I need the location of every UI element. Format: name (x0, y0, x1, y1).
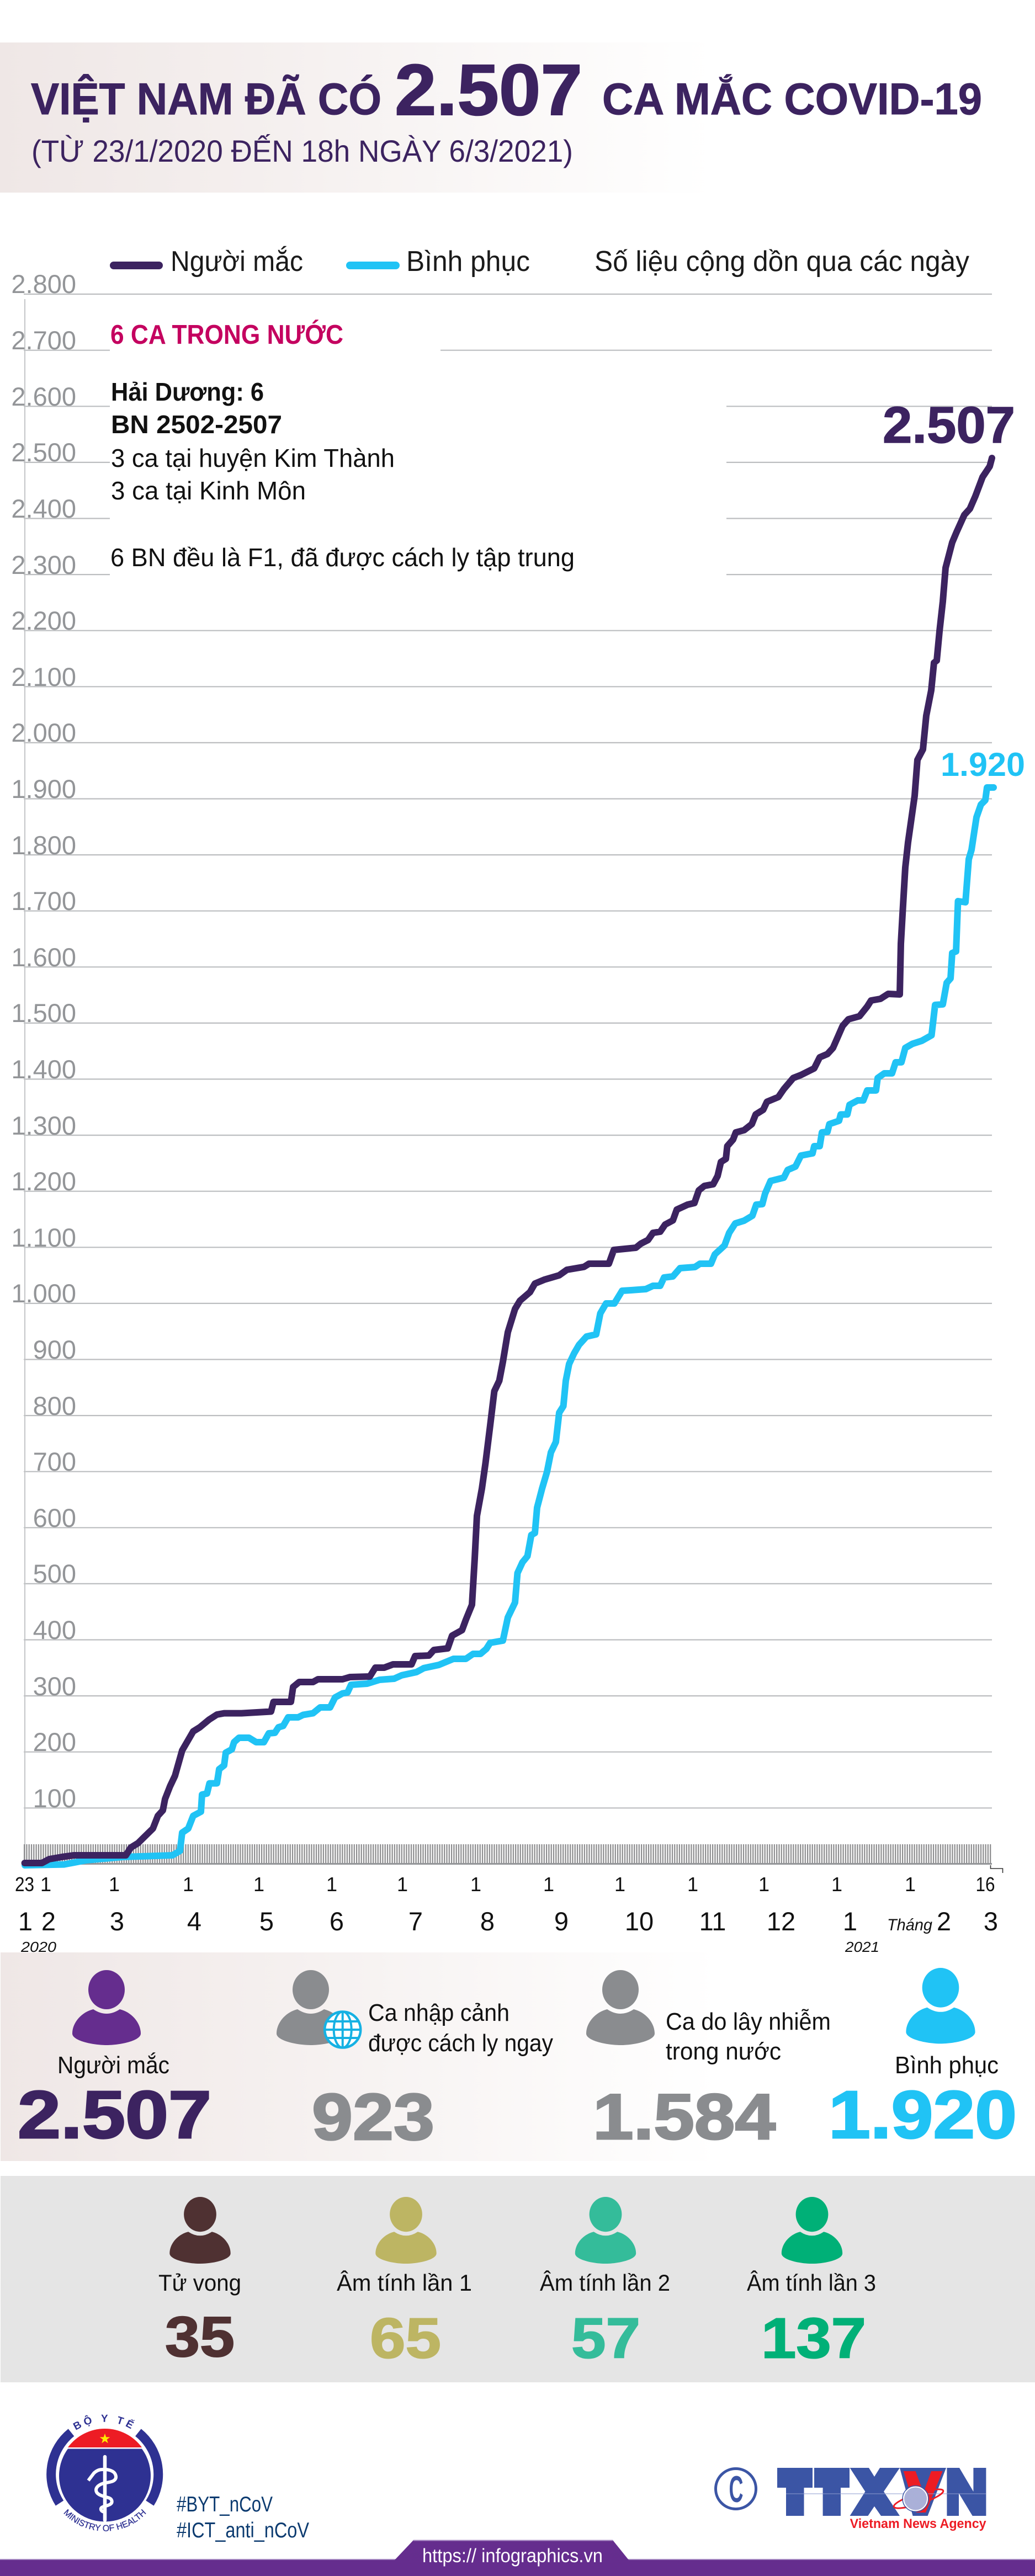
y axis labels: 1.900 (11, 774, 76, 803)
legend: Người mắc (171, 246, 303, 278)
x axis day ticks: 1 (614, 1873, 625, 1896)
y axis labels: 300 (33, 1672, 76, 1701)
footer bar (0, 2540, 1035, 2576)
logo: TTXVN (777, 2468, 986, 2516)
y axis labels: 900 (33, 1335, 76, 1364)
hashtags: #ICT_anti_nCoV (177, 2519, 309, 2542)
line chart: recovered (25, 787, 994, 1865)
number: confirmed: 2.507 (18, 2077, 211, 2152)
y axis labels: 500 (33, 1559, 76, 1588)
label: negative once: Âm tính lần 1 (337, 2270, 472, 2296)
panel: secondary totals (1, 2176, 1035, 2382)
y axis labels: 400 (33, 1615, 76, 1644)
y axis labels: 100 (33, 1784, 76, 1813)
y axis labels: 1.800 (11, 831, 76, 860)
icon: globe (325, 2011, 360, 2048)
y axis labels: 1.400 (11, 1055, 76, 1084)
x axis day ticks (15, 1873, 995, 1896)
label: imported cases (368, 1999, 553, 2057)
icon: negative three times person (782, 2197, 842, 2264)
x axis day ticks: 1 (758, 1873, 769, 1896)
x axis day ticks: 1 (183, 1873, 194, 1896)
year 2021: 2021 (845, 1939, 879, 1955)
label: imported cases: được cách ly ngay (368, 2030, 553, 2057)
icon: recovered person (906, 1968, 975, 2043)
legend (114, 246, 969, 278)
callout body: BN 2502-2507 (111, 410, 282, 439)
agency name: Vietnam News Agency (850, 2516, 986, 2531)
end label: confirmed: 2.507 (883, 396, 1015, 454)
x axis day ticks: 1 (470, 1873, 481, 1896)
y axis labels: 200 (33, 1727, 76, 1757)
website url: https:// infographics.vn (422, 2545, 603, 2567)
heading: VIỆT NAM ĐÃ CÓ (31, 74, 381, 124)
y axis labels: 700 (33, 1447, 76, 1476)
x axis day ticks: 1 (326, 1873, 337, 1896)
y axis labels: 1.300 (11, 1111, 76, 1140)
line chart: confirmed cases (25, 458, 992, 1863)
panel: main totals (1, 1952, 1017, 2161)
x axis day ticks: 23 (15, 1873, 34, 1896)
x axis month labels: 6 (330, 1907, 344, 1936)
icon: imported case person (277, 1970, 345, 2045)
y axis labels: 800 (33, 1391, 76, 1420)
year 2020: 2020 (20, 1939, 57, 1955)
icon: domestic case person (586, 1970, 655, 2045)
x axis day ticks: 1 (109, 1873, 120, 1896)
hashtags: #BYT_nCoV (177, 2493, 273, 2516)
label: negative three times: Âm tính lần 3 (747, 2270, 876, 2296)
x axis day ticks: 16 (976, 1873, 995, 1896)
hashtags (177, 2493, 309, 2542)
x axis month labels: 4 (187, 1907, 201, 1936)
logo: Ministry of Health: BỘ Y TẾ (73, 2415, 135, 2430)
x axis month labels (18, 1907, 998, 1936)
y axis labels: 1.200 (11, 1167, 76, 1196)
y axis labels: 2.500 (11, 438, 76, 467)
y axis labels: 2.300 (11, 550, 76, 579)
callout body: Hải Dương: 6 (111, 377, 264, 406)
callout: 6 domestic cases (110, 320, 575, 572)
heading: 2.507 (395, 49, 582, 130)
y axis labels: 2.200 (11, 606, 76, 635)
number: deaths: 35 (165, 2305, 235, 2369)
label: negative twice: Âm tính lần 2 (540, 2270, 670, 2296)
number: negative twice: 57 (571, 2307, 640, 2370)
title panel (0, 42, 982, 193)
legend: Bình phục (406, 246, 530, 278)
y axis labels (11, 269, 76, 1813)
x axis day ticks: 1 (905, 1873, 916, 1896)
x axis day ticks: 1 (543, 1873, 554, 1896)
x axis month labels: 1 (843, 1907, 857, 1936)
y axis labels: 1.700 (11, 886, 76, 916)
y axis labels: 1.500 (11, 998, 76, 1028)
label: domestic cases: Ca do lây nhiễm (666, 2008, 831, 2035)
x axis month labels: 11 (699, 1907, 726, 1936)
y axis labels: 1.000 (11, 1279, 76, 1308)
icon: confirmed person (72, 1970, 141, 2045)
x axis day ticks: 1 (687, 1873, 698, 1896)
date band along x axis (24, 1844, 1002, 1873)
y axis labels: 600 (33, 1503, 76, 1532)
end label: recovered: 1.920 (941, 746, 1025, 783)
x axis day ticks: 1 (253, 1873, 264, 1896)
heading: CA MẮC COVID-19 (602, 74, 982, 124)
x axis month labels: 5 (259, 1907, 274, 1936)
label: domestic cases: trong nước (666, 2038, 781, 2065)
label: domestic cases (666, 2008, 831, 2065)
x axis month labels: 12 (767, 1907, 795, 1936)
x axis month labels: 9 (554, 1907, 569, 1936)
y axis labels: 1.600 (11, 943, 76, 972)
y axis labels: 2.100 (11, 662, 76, 691)
number: domestic cases: 1.584 (593, 2080, 776, 2153)
label: confirmed: Người mắc (57, 2052, 169, 2079)
callout body (110, 377, 575, 572)
callout heading: 6 CA TRONG NƯỚC (110, 320, 343, 350)
number: negative three times: 137 (761, 2307, 866, 2370)
label: deaths: Tử vong (158, 2270, 241, 2296)
logo: copyright mark: C (729, 2468, 743, 2510)
y axis labels: 2.400 (11, 494, 76, 523)
logo: Ministry of Health (46, 2415, 163, 2531)
x axis month labels: 8 (480, 1907, 495, 1936)
x axis day ticks: 1 (397, 1873, 408, 1896)
number: negative once: 65 (370, 2307, 441, 2370)
callout body: 3 ca tại Kinh Môn (111, 476, 306, 505)
y axis labels: 2.000 (11, 718, 76, 747)
icon: deaths person (169, 2197, 231, 2264)
number: recovered: 1.920 (829, 2077, 1017, 2152)
x axis day ticks: 1 (40, 1873, 51, 1896)
x axis month labels: 1 (18, 1907, 33, 1936)
y axis labels: 2.600 (11, 382, 76, 411)
heading (31, 49, 982, 130)
logo: Ministry of Health: MINISTRY OF HEALTH (63, 2509, 146, 2531)
x axis month labels: 10 (625, 1907, 654, 1936)
callout body: 6 BN đều là F1, đã được cách ly tập trung (110, 543, 575, 572)
legend: Số liệu cộng dồn qua các ngày (595, 246, 969, 278)
number: imported cases: 923 (312, 2080, 434, 2154)
subtitle: (TỪ 23/1/2020 ĐẾN 18h NGÀY 6/3/2021) (31, 134, 573, 168)
x axis month labels: 2 (937, 1907, 951, 1936)
x axis month labels: 7 (408, 1907, 423, 1936)
y axis labels: 2.800 (11, 269, 76, 299)
x axis month labels: 2 (41, 1907, 56, 1936)
y axis labels: 1.100 (11, 1223, 76, 1252)
x axis day ticks: 1 (831, 1873, 842, 1896)
label: recovered: Bình phục (895, 2052, 999, 2079)
logo: copyright mark (715, 2468, 756, 2510)
x axis month labels: 3 (110, 1907, 124, 1936)
month caption: Tháng (887, 1916, 932, 1934)
icon: negative once person (375, 2197, 437, 2264)
x axis month labels: 3 (984, 1907, 998, 1936)
y axis labels: 2.700 (11, 326, 76, 355)
label: imported cases: Ca nhập cảnh (368, 1999, 509, 2026)
callout body: 3 ca tại huyện Kim Thành (111, 444, 395, 472)
icon: negative twice person (575, 2197, 636, 2264)
